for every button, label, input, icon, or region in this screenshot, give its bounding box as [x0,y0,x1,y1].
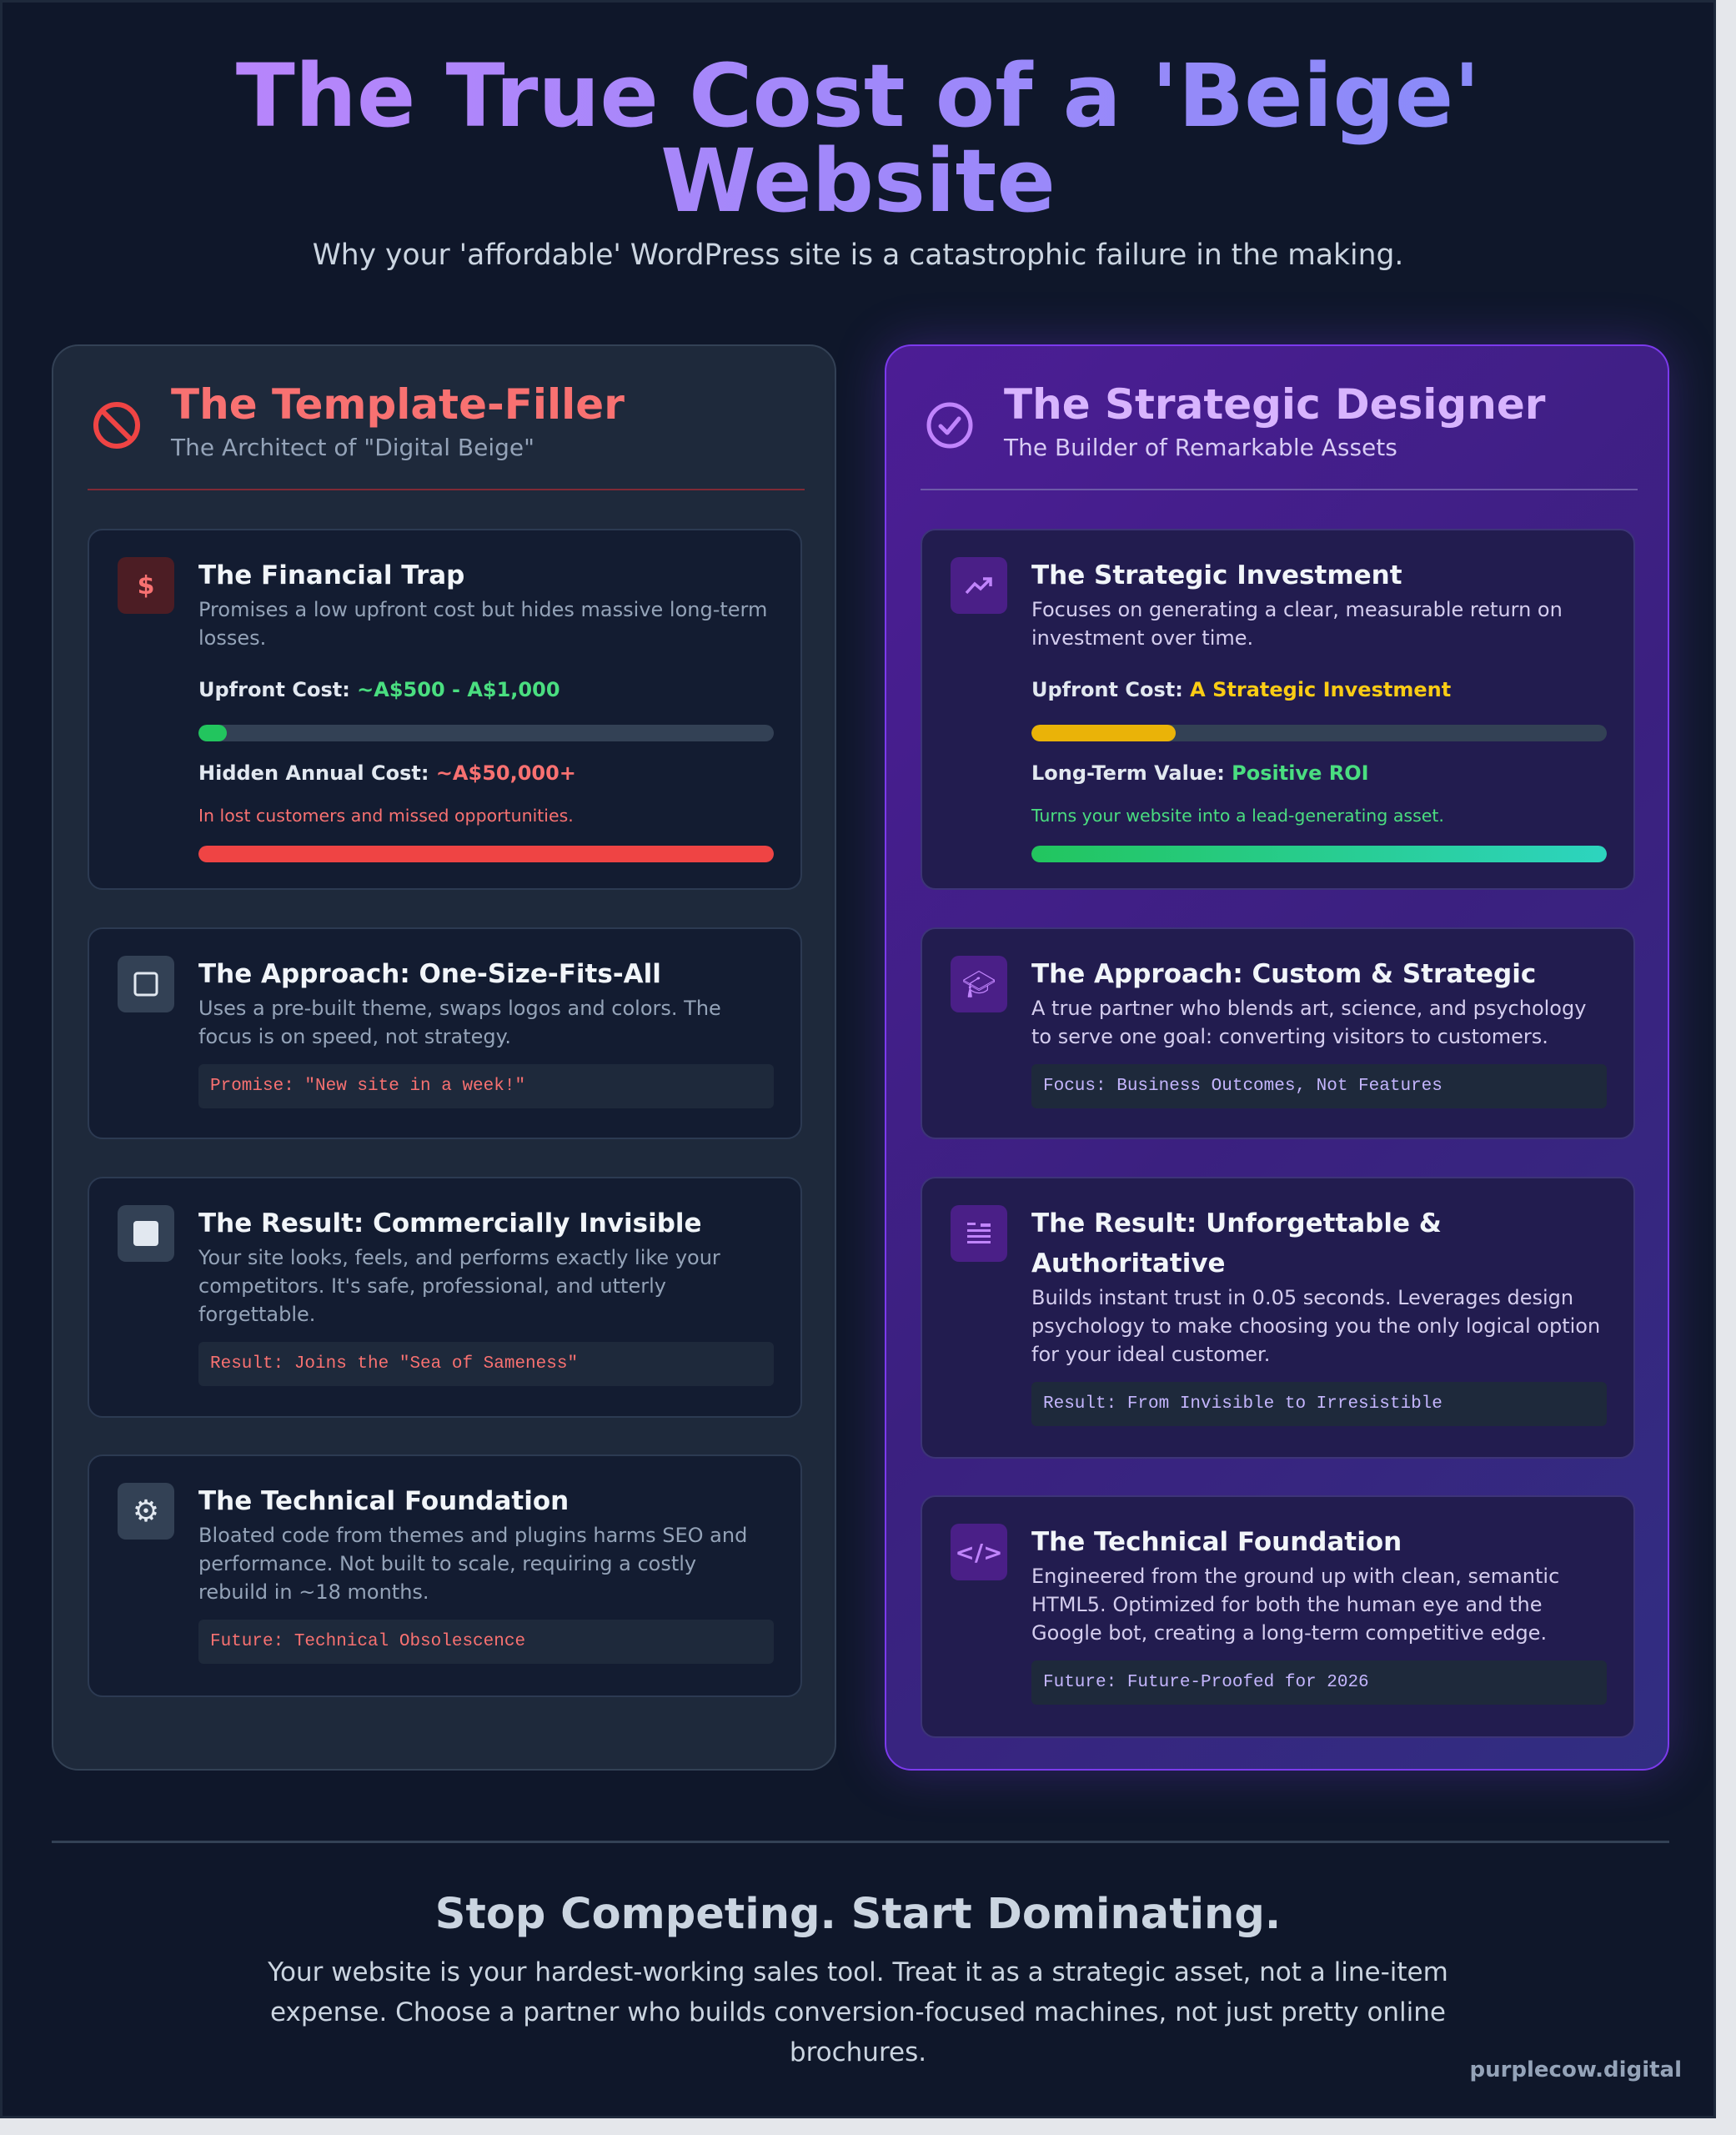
card: result: The Result: Commercially Invisible [198,1208,702,1238]
title: Website [660,130,1056,232]
icon: gear: ⚙ [133,1494,159,1528]
icon: graduation cap: 🎓︎ [962,968,996,1000]
panel header: template-filler [88,376,805,490]
CTA heading: Stop Competing. Start Dominating. [435,1890,1281,1939]
bar: hidden cost [198,846,774,862]
card: technical foundation: Bloated code from themes and plugins harms SEO and [198,1524,747,1547]
card: approach: Promise: "New site in a week!" [210,1077,525,1096]
card: technical foundation: performance. Not built to scale, requiring a costly [198,1552,696,1575]
panel header: template-filler: The Architect of "Digital Beige" [171,434,534,461]
icon: code: </> [955,1538,1003,1566]
icon: gear [118,1483,174,1540]
icon: filled square [118,1205,174,1262]
panel: template-filler [52,344,836,1771]
icon: square [118,956,174,1012]
panel header: strategic designer: The Builder of Remarkable Assets [1004,434,1397,461]
bar: upfront cost [198,725,774,741]
card: financial trap: Upfront Cost: ~A$500 - A$1,000 [198,678,560,701]
card: financial trap [88,529,802,890]
card: strategic investment: Turns your website into a lead-generating asset. [1031,806,1444,826]
card: approach custom: The Approach: Custom & Strategic [1031,959,1536,989]
card: technical foundation: The Technical Foundation [1031,1527,1402,1557]
card: strategic investment: Upfront Cost: A Strategic Investment [1031,678,1451,701]
card: approach custom [921,927,1635,1139]
icon: check circle [927,402,972,449]
subtitle: Why your 'affordable' WordPress site is a catastrophic failure in the making. [313,239,1403,272]
card: approach [88,927,802,1139]
card: result unforgettable: Result: From Invisible to Irresistible [1043,1394,1442,1414]
icon: trap [118,557,174,614]
panel header: strategic designer [921,376,1638,490]
card: approach: The Approach: One-Size-Fits-All [198,959,661,989]
card: technical foundation [88,1454,802,1697]
panel: strategic designer [885,344,1669,1771]
card: result: Result: Joins the "Sea of Sameness" [210,1354,578,1374]
card: strategic investment [921,529,1635,890]
bar: ROI [1031,846,1607,862]
card: result unforgettable: Builds instant trust in 0.05 seconds. Leverages design psychology to make choosing you the only logical option for your ideal customer. [1031,1286,1600,1366]
card: technical foundation: Engineered from the ground up with clean, semantic HTML5. Optimized for both the human eye and the Google bot, creating a long-term competitive edge. [1031,1565,1559,1645]
card: financial trap: The Financial Trap [198,560,464,590]
icon: list [951,1205,1007,1262]
card: strategic investment: Focuses on generating a clear, measurable return on investment over time. [1031,598,1563,650]
card: result unforgettable: The Result: Unforgettable & Authoritative [1031,1208,1442,1278]
card: technical foundation: Future: Technical Obsolescence [210,1632,525,1651]
icon: code [951,1524,1007,1580]
icon: trap: $ [138,570,154,600]
title: The True Cost of a 'Beige' [236,45,1480,147]
card: financial trap: In lost customers and missed opportunities. [198,806,574,826]
icon: graduation cap [951,956,1007,1012]
card: technical foundation: The Technical Foundation [198,1486,569,1516]
card: strategic investment: The Strategic Investment [1031,560,1402,590]
card: result unforgettable [921,1177,1635,1459]
card: result: Your site looks, feels, and performs exactly like your competitors. It's safe, professional, and utterly forgettable. [198,1246,720,1326]
card: financial trap: Hidden Annual Cost: ~A$50,000+ [198,761,576,785]
CTA paragraph: Your website is your hardest-working sales tool. Treat it as a strategic asset, not a line-item expense. Choose a partner who builds conversion-focused machines, not just pretty online brochures. [268,1957,1448,2067]
card: strategic investment: Long-Term Value: Positive ROI [1031,761,1369,785]
icon: trend up [951,557,1007,614]
card: technical foundation: Future: Future-Proofed for 2026 [1043,1673,1369,1692]
card: technical foundation [921,1495,1635,1738]
card: approach: Uses a pre-built theme, swaps logos and colors. The focus is on speed, not strategy. [198,997,721,1048]
card: financial trap: Promises a low upfront cost but hides massive long-term losses. [198,598,767,650]
watermark: purplecow.digital [1469,2057,1682,2082]
title [3,53,1713,224]
panel header: template-filler: The Template-Filler [171,380,625,429]
card: technical foundation: rebuild in ~18 months. [198,1580,429,1604]
card: approach custom: A true partner who blends art, science, and psychology to serve one goal: converting visitors to customers. [1031,997,1586,1048]
icon: prohibited [93,402,140,449]
panel header: strategic designer: The Strategic Designer [1004,380,1545,429]
bar: investment [1031,725,1607,741]
card: approach custom: Focus: Business Outcomes, Not Features [1043,1077,1442,1096]
card: result [88,1177,802,1418]
